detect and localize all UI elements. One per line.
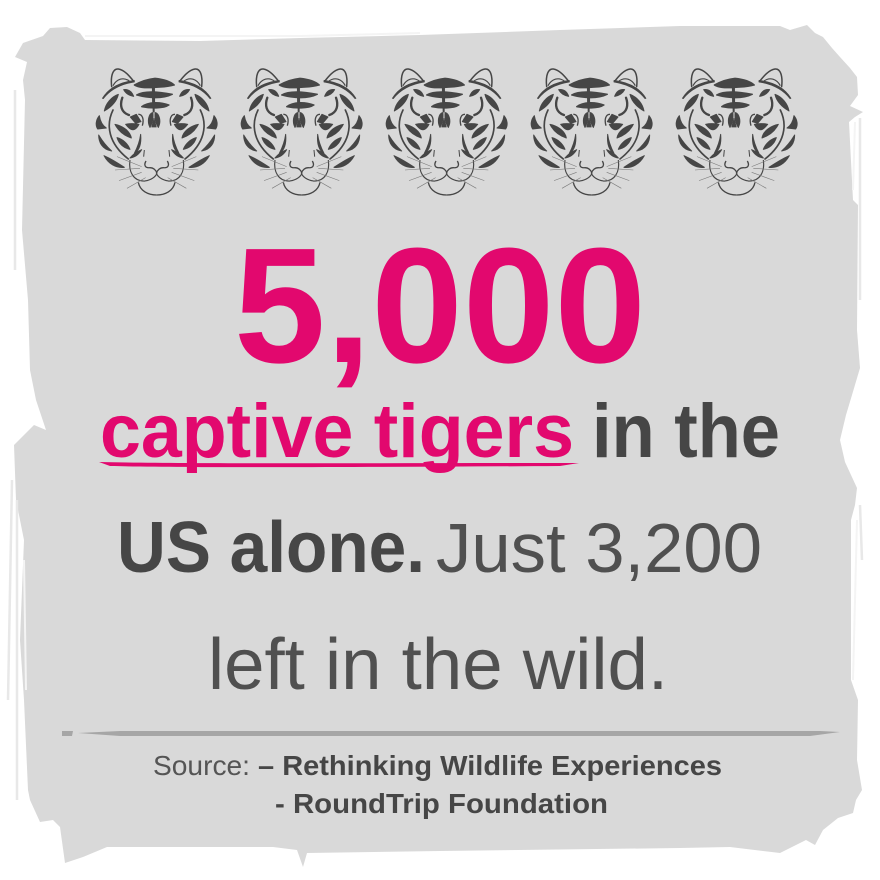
line three: left in the wild. <box>208 625 668 705</box>
headline text <box>99 389 780 705</box>
headline remainder line one: in the <box>592 389 780 474</box>
icon: tiger 4 <box>531 69 652 195</box>
white streaks inside the panel edge <box>24 33 857 690</box>
dry-brush streaks outside the panel <box>8 90 862 800</box>
source one: – Rethinking Wildlife Experiences <box>258 750 722 781</box>
line two bold: US alone. <box>117 508 425 588</box>
icon: tiger 5 <box>676 69 797 195</box>
source two: - RoundTrip Foundation <box>275 788 608 819</box>
icon: tiger 1 <box>96 69 217 195</box>
row of tiger icons <box>96 69 797 195</box>
big number: 5,000 <box>234 214 646 397</box>
divider <box>62 731 840 736</box>
icon: tiger 3 <box>386 69 507 195</box>
highlighted phrase: captive tigers <box>100 389 574 474</box>
pink brush underline <box>99 462 579 467</box>
source text <box>153 750 722 819</box>
icon: tiger 2 <box>241 69 362 195</box>
source label: Source: <box>153 750 250 781</box>
line two regular: Just 3,200 <box>436 509 762 587</box>
